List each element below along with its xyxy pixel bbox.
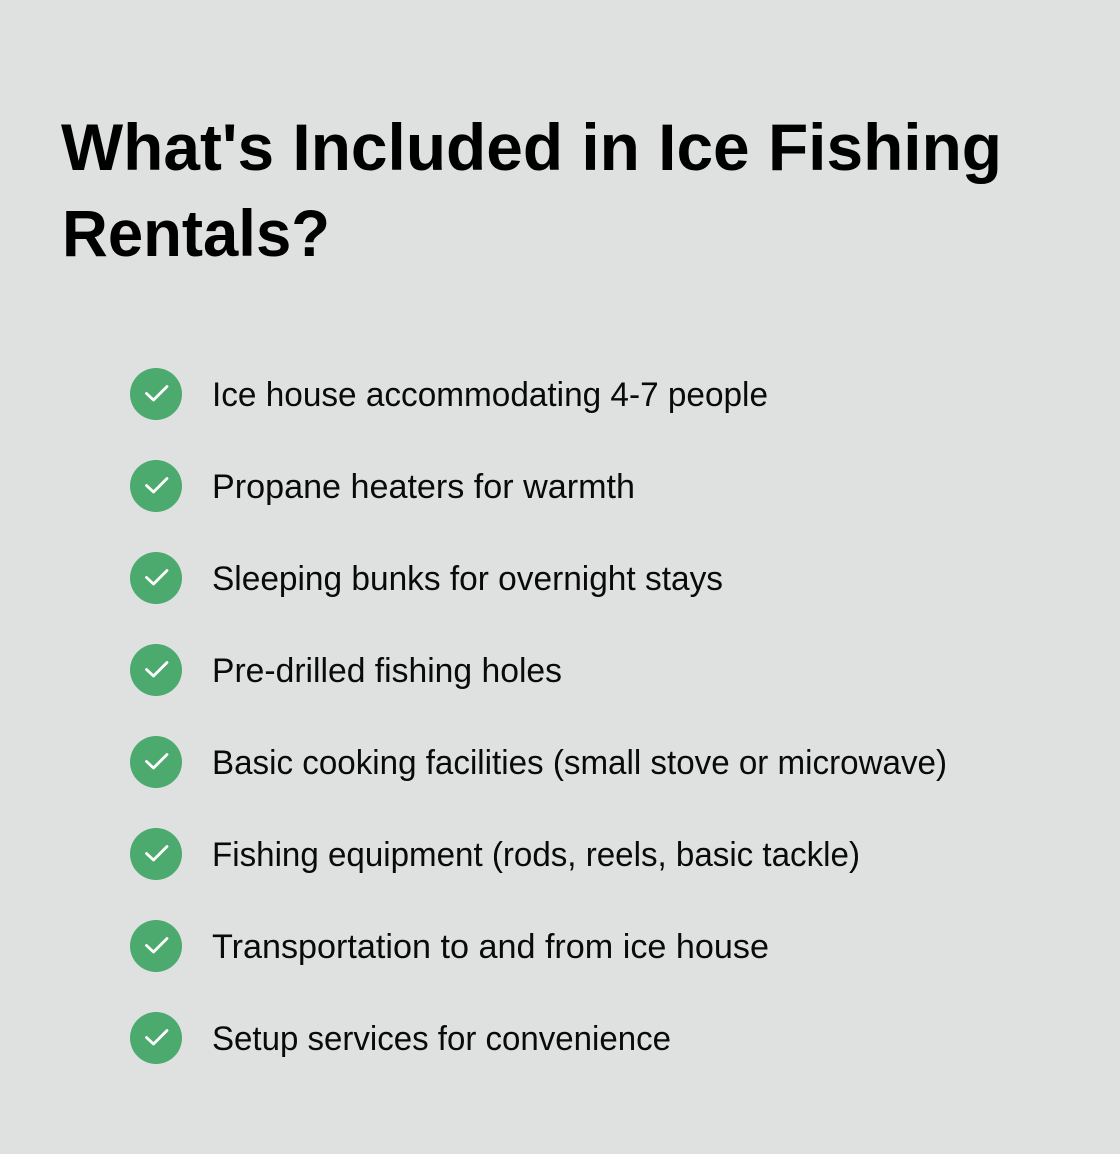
item: propane heaters: Propane heaters for warmth xyxy=(212,468,635,506)
item: setup services xyxy=(130,1012,671,1064)
item: sleeping bunks xyxy=(130,552,723,604)
title: Rentals? xyxy=(62,196,330,270)
item: pre-drilled holes xyxy=(130,644,562,696)
item: transportation: Transportation to and from ice house xyxy=(212,928,769,966)
item: cooking facilities xyxy=(130,736,947,788)
item: propane heaters xyxy=(130,460,635,512)
item: ice house: Ice house accommodating 4-7 people xyxy=(212,376,768,414)
item: pre-drilled holes: Pre-drilled fishing holes xyxy=(212,652,562,690)
title xyxy=(61,110,1002,270)
item: cooking facilities: Basic cooking facilities (small stove or microwave) xyxy=(212,744,947,782)
item: transportation xyxy=(130,920,769,972)
item: fishing equipment xyxy=(130,828,860,880)
title: What's Included in Ice Fishing xyxy=(61,110,1002,184)
item: setup services: Setup services for convenience xyxy=(212,1020,671,1058)
item: sleeping bunks: Sleeping bunks for overnight stays xyxy=(212,560,723,598)
item: ice house xyxy=(130,368,768,420)
checklist xyxy=(130,368,947,1064)
item: fishing equipment: Fishing equipment (rods, reels, basic tackle) xyxy=(212,836,860,874)
